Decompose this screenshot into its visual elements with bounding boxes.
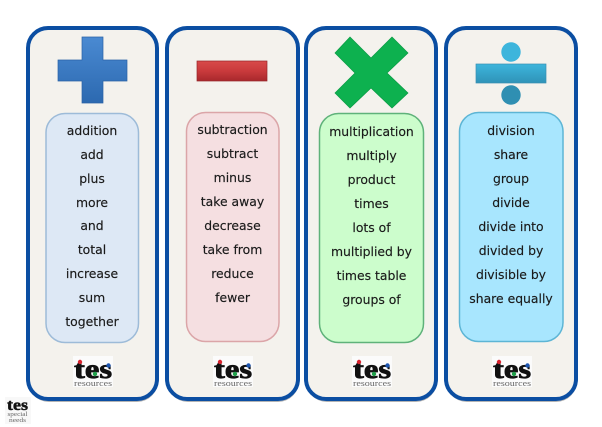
- word list: subtraction: fewer: [215, 290, 251, 305]
- word list: subtraction: decrease: [204, 218, 261, 233]
- logo: tes resources: resources: [74, 379, 112, 388]
- word list: addition: plus: [79, 171, 105, 186]
- word list: multiplication: multiply: [346, 148, 397, 163]
- word list: addition: together: [65, 314, 120, 329]
- word list: multiplication: lots of: [352, 220, 391, 235]
- word list: multiplication: product: [348, 172, 395, 187]
- word list: subtraction: subtraction: [197, 122, 268, 137]
- word list: addition: increase: [66, 266, 118, 281]
- word list: division: divide: [492, 195, 530, 210]
- word list: division: share equally: [469, 291, 553, 306]
- logo: tes resources: [352, 354, 392, 388]
- word list: subtraction: subtract: [207, 146, 258, 161]
- word list: multiplication: multiplication: [329, 124, 414, 139]
- word list: subtraction: take from: [203, 242, 262, 257]
- word list: multiplication: groups of: [342, 292, 401, 307]
- word list: addition: sum: [79, 290, 105, 305]
- logo: tes special needs: needs: [9, 417, 27, 424]
- panel: subtraction: [167, 28, 299, 402]
- word list: subtraction: take away: [201, 194, 264, 209]
- logo: tes resources: tes: [493, 354, 531, 384]
- word list: addition: total: [78, 242, 106, 257]
- word list: addition: and: [80, 218, 104, 233]
- word list: multiplication: multiplied by: [331, 244, 412, 259]
- word list: division: share: [494, 147, 528, 162]
- word list: subtraction: reduce: [211, 266, 254, 281]
- logo: tes special needs: [5, 397, 31, 424]
- icon: minus sign: [197, 61, 267, 81]
- word list: division: divided by: [479, 243, 543, 258]
- logo: tes special needs: special: [8, 411, 28, 418]
- word list: division: [460, 112, 563, 342]
- word list: addition: more: [76, 195, 108, 210]
- panel: multiplication: [306, 28, 437, 402]
- word list: division: divide into: [478, 219, 544, 234]
- word list: multiplication: [320, 114, 424, 342]
- logo: tes resources: tes: [353, 354, 391, 384]
- logo: tes resources: tes: [74, 354, 112, 384]
- logo: tes resources: [213, 354, 253, 388]
- icon: multiplication sign: [335, 37, 408, 108]
- word list: addition: addition: [67, 123, 117, 138]
- word list: addition: [46, 114, 138, 342]
- logo: tes resources: tes: [214, 354, 252, 384]
- word list: addition: add: [80, 147, 104, 162]
- panel: division: [446, 28, 577, 402]
- icon: plus sign: [58, 37, 127, 103]
- word list: division: divisible by: [476, 267, 546, 282]
- word list: division: group: [493, 171, 529, 186]
- panel: addition: [28, 28, 158, 402]
- word list: subtraction: minus: [214, 170, 251, 185]
- word list: multiplication: times: [354, 196, 389, 211]
- icon: division sign: [476, 42, 546, 105]
- logo: tes resources: [73, 354, 113, 388]
- logo: tes special needs: tes: [7, 397, 28, 414]
- logo: tes resources: resources: [493, 379, 531, 388]
- logo: tes resources: resources: [353, 379, 391, 388]
- word list: division: division: [487, 123, 535, 138]
- word list: multiplication: times table: [337, 268, 406, 283]
- logo: tes resources: [492, 354, 532, 388]
- word list: subtraction: [186, 112, 279, 342]
- logo: tes resources: resources: [214, 379, 252, 388]
